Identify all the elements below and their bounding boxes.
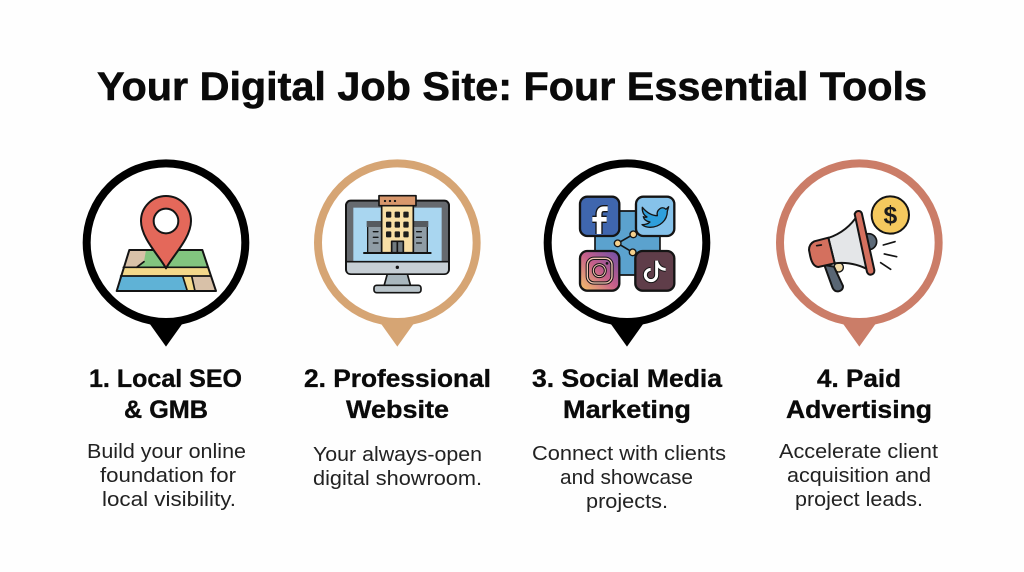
- description 2: Your always-open: [313, 444, 482, 466]
- description 4: [779, 441, 938, 511]
- description 2: [313, 444, 482, 490]
- panel: Local SEO & GMB: [87, 163, 246, 511]
- heading 2: [304, 365, 491, 424]
- icon: office building: [364, 196, 431, 253]
- heading 2: Website: [346, 396, 449, 424]
- heading 4: [786, 365, 932, 424]
- description 2: digital showroom.: [313, 468, 482, 490]
- description 3: and showcase: [560, 467, 693, 489]
- description 1: [87, 441, 246, 511]
- pin badge with megaphone icon: [780, 163, 939, 347]
- description 4: acquisition and: [787, 465, 931, 487]
- icon: dollar coin: [872, 196, 909, 234]
- icon: monitor: [346, 201, 449, 293]
- title: Your Digital Job Site: Four Essential Tools: [97, 65, 927, 109]
- description 4: project leads.: [795, 489, 923, 511]
- heading 1: & GMB: [124, 396, 208, 424]
- icon: dollar coin: $: [883, 203, 897, 230]
- pin badge with map icon: [87, 163, 245, 347]
- heading 3: [532, 365, 723, 424]
- heading 1: 1. Local SEO: [89, 365, 242, 393]
- pin badge with monitor icon: [318, 163, 477, 347]
- icon: megaphone: [809, 211, 897, 291]
- icon: twitter: [636, 197, 674, 236]
- panel: Professional Website: [304, 163, 491, 490]
- icon: facebook: [580, 197, 619, 236]
- description 3: [532, 443, 726, 513]
- icon: tiktok: [635, 251, 674, 291]
- heading 1: [89, 365, 242, 424]
- description 4: Accelerate client: [779, 441, 938, 463]
- heading 4: Advertising: [786, 396, 932, 424]
- panel: Paid Advertising: [779, 163, 939, 511]
- icon: share hub: [595, 211, 660, 275]
- description 1: Build your online: [87, 441, 246, 463]
- description 1: foundation for: [100, 465, 236, 487]
- heading 4: 4. Paid: [817, 365, 901, 393]
- icon: map: [117, 250, 216, 291]
- icon: instagram: [580, 251, 619, 291]
- description 3: projects.: [586, 491, 668, 513]
- heading 3: 3. Social Media: [532, 365, 723, 393]
- pin badge with social media icons: [548, 163, 706, 347]
- description 1: local visibility.: [102, 489, 236, 511]
- heading 2: 2. Professional: [304, 365, 491, 393]
- panel: Social Media Marketing: [532, 163, 726, 513]
- description 3: Connect with clients: [532, 443, 726, 465]
- icon: location pin: [141, 196, 191, 268]
- heading 3: Marketing: [563, 396, 691, 424]
